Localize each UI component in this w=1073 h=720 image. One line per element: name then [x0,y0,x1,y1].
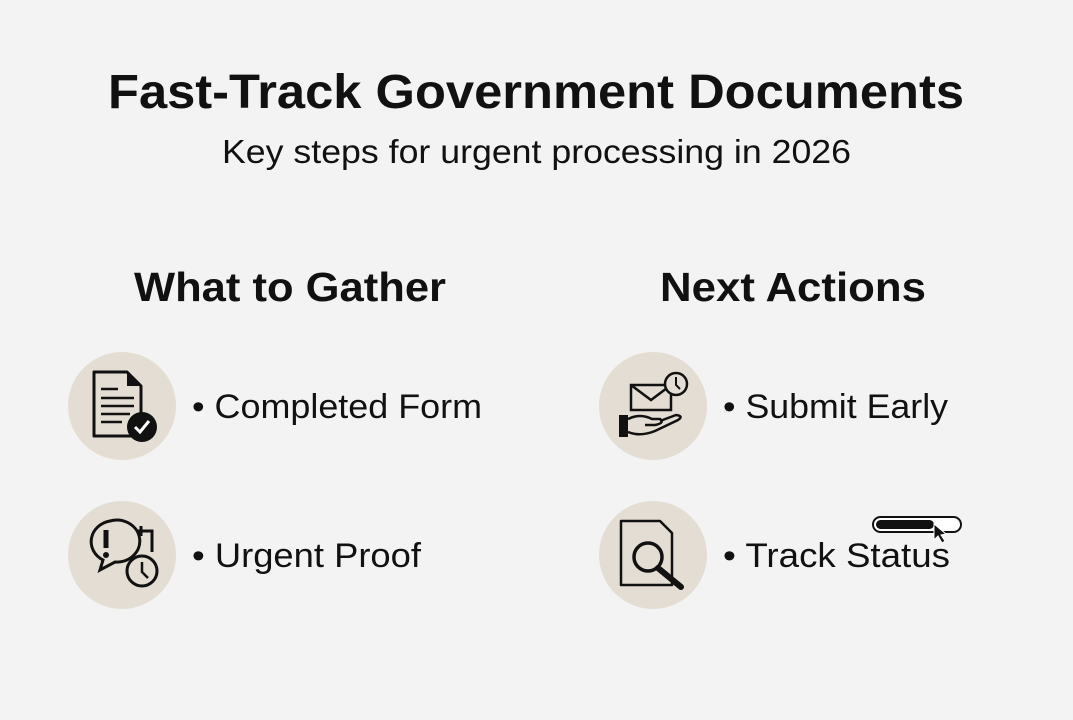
label: • Track Status [723,537,950,575]
item: urgent proof [68,501,422,609]
item: submit early [599,352,948,460]
icon: progress bar with cursor [873,517,961,543]
title: Fast-Track Government Documents [108,66,964,119]
icon: document with magnifier [599,501,707,609]
subtitle: Key steps for urgent processing in 2026 [222,133,851,170]
item: track status [599,501,961,609]
heading: what to gather: What to Gather [134,264,446,310]
label: • Completed Form [192,388,482,426]
icon: envelope on hand with clock [599,352,707,460]
item: completed form [68,352,482,460]
icon: document with check [68,352,176,460]
label: • Submit Early [723,388,948,426]
heading: next actions: Next Actions [660,264,926,310]
icon: alert bubble with clock [68,501,176,609]
label: • Urgent Proof [192,537,422,575]
